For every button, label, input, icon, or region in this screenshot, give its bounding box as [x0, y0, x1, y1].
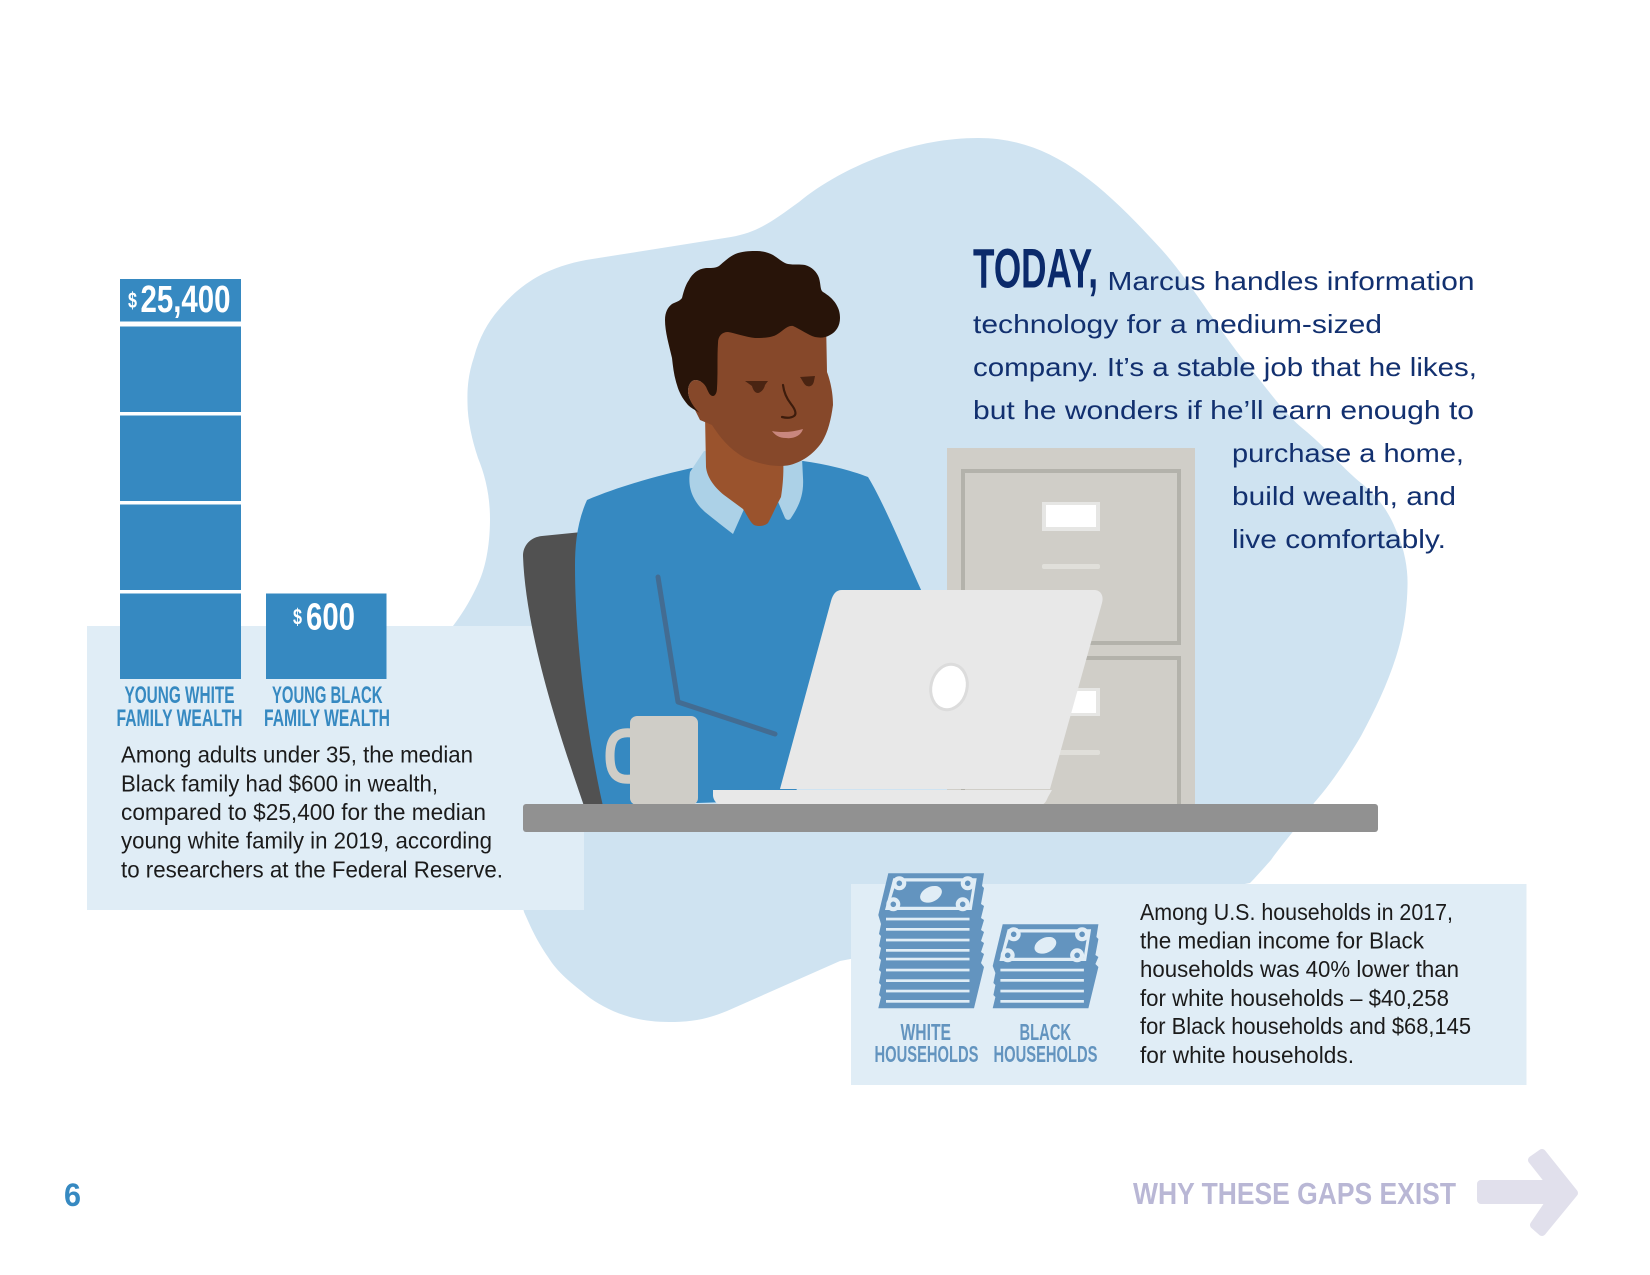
right eye	[800, 376, 815, 386]
mouth	[772, 429, 803, 438]
text block: wealth explanation	[121, 742, 503, 882]
nose	[782, 385, 795, 418]
panel: wealth background	[87, 626, 584, 910]
text block: income explanation: for white households – $40,258	[1140, 985, 1449, 1011]
text block: income explanation: for Black households and $68,145	[1140, 1013, 1471, 1039]
text block: wealth explanation: Black family had $600 in wealth,	[121, 770, 438, 796]
label: white households: HOUSEHOLDS	[874, 1041, 978, 1067]
label: young black family wealth	[264, 682, 390, 732]
heading and story text: purchase a home,	[1232, 438, 1464, 468]
text block: wealth explanation: Among adults under 35, the median	[121, 742, 473, 768]
text block: income explanation: the median income for Black	[1140, 928, 1424, 954]
heading and story text: Marcus handles information	[1108, 266, 1474, 296]
label: young black family wealth: YOUNG BLACK	[272, 682, 383, 709]
label: young white family wealth	[116, 682, 242, 732]
left eye	[745, 381, 768, 393]
heading and story text: but he wonders if he’ll earn enough to	[973, 395, 1474, 425]
text block: income explanation: households was 40% lower than	[1140, 956, 1459, 982]
text block: income explanation: for white households.	[1140, 1042, 1354, 1068]
illustration: chair	[523, 532, 610, 806]
face	[690, 320, 833, 466]
sweater	[575, 461, 922, 806]
bar: young white family wealth	[120, 279, 241, 679]
heading and story text	[973, 236, 1477, 554]
label: young black family wealth: FAMILY WEALTH	[264, 705, 390, 732]
illustration: desk	[523, 804, 1378, 832]
hair	[665, 251, 840, 413]
bar: young white family wealth: $	[128, 288, 137, 313]
label: black households: BLACK	[1020, 1019, 1071, 1045]
label: black households	[994, 1019, 1098, 1067]
ear	[688, 380, 712, 425]
heading and story text: company. It’s a stable job that he likes,	[973, 352, 1477, 382]
arm line	[658, 577, 775, 734]
heading and story text: live comfortably.	[1232, 524, 1446, 554]
footer label: why these gaps exist: WHY THESE GAPS EXIST	[1133, 1176, 1456, 1211]
label: black households: HOUSEHOLDS	[994, 1041, 1098, 1067]
label: white households	[874, 1019, 978, 1067]
text block: income explanation	[1140, 899, 1471, 1068]
heading and story text: build wealth, and	[1232, 481, 1456, 511]
arrow: next section	[1481, 1153, 1574, 1232]
label: white households: WHITE	[900, 1019, 951, 1045]
bar: young white family wealth: 25,400	[140, 279, 230, 321]
text block: wealth explanation: young white family in 2019, according	[121, 828, 492, 854]
bar: young black family wealth: $	[293, 604, 302, 630]
heading and story text: TODAY,	[973, 236, 1098, 300]
illustration: mug	[610, 716, 698, 805]
text block: income explanation: Among U.S. households in 2017,	[1140, 899, 1453, 925]
text block: wealth explanation: compared to $25,400 for the median	[121, 799, 486, 825]
illustration: laptop	[713, 590, 1103, 805]
text block: wealth explanation: to researchers at the Federal Reserve.	[121, 856, 503, 882]
label: young white family wealth: YOUNG WHITE	[124, 682, 234, 709]
heading and story text: technology for a medium-sized	[973, 309, 1382, 339]
illustration: filing cabinet	[947, 448, 1195, 804]
icon: black households money stack	[993, 924, 1098, 1008]
page number: 6	[64, 1177, 81, 1213]
illustration: man	[575, 251, 922, 806]
background blob	[453, 138, 1408, 1022]
collar	[689, 451, 803, 534]
bar: young black family wealth	[266, 594, 386, 679]
icon: white households money stack	[878, 873, 984, 1008]
label: young white family wealth: FAMILY WEALTH	[116, 705, 242, 732]
panel: income background	[851, 884, 1526, 1085]
bar chart: young family wealth	[116, 279, 390, 732]
bar: young black family wealth: 600	[306, 596, 355, 638]
neck	[705, 415, 783, 526]
